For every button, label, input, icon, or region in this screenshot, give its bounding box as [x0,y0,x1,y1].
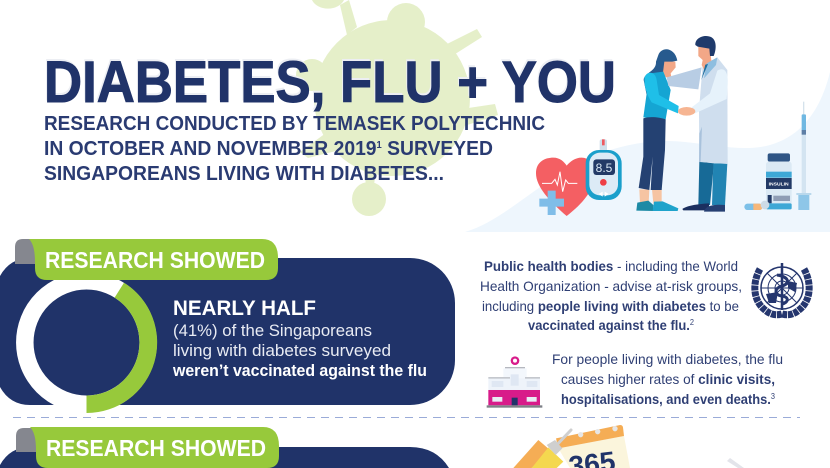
subtitle: IN OCTOBER AND NOVEMBER 2019 [44,137,397,160]
icon: pills [744,201,769,210]
tab: research showed [29,239,278,280]
WHO advice text [480,258,742,333]
stat text [172,296,427,380]
icon: syringe [796,102,811,210]
icon: glucose meter: 8.5 [596,161,613,175]
icon: WHO emblem [755,263,809,315]
WHO advice text: vaccinated against the flu. [528,317,703,333]
clinical impact text [552,351,783,407]
woman [636,49,679,211]
icon: heart with pulse [536,158,595,216]
WHO advice text: Public health bodies - including the World [484,258,738,274]
icon: hospital [487,356,542,408]
clinical impact text: For people living with diabetes, the flu [552,351,783,367]
title: DIABETES, FLU + YOU [44,50,616,115]
subtitle: 1 [377,140,382,151]
icon: glucose meter [586,139,622,200]
illustration: doctor and patient [636,36,728,212]
clinical impact text: causes higher rates of clinic visits, [561,371,775,387]
subtitle: RESEARCH CONDUCTED BY TEMASEK POLYTECHNIC [44,112,545,135]
icon: calendar and vaccine pen [513,425,630,468]
subtitle [44,112,545,185]
doctor [667,36,728,212]
WHO advice text: including people living with diabetes to be [482,298,739,314]
clinical impact text: 3 [771,392,776,401]
tab: research showed: RESEARCH SHOWED [45,247,265,273]
icon: virus background [296,0,498,216]
clinical impact text: hospitalisations, and even deaths. [561,391,789,407]
stat text: living with diabetes surveyed [173,342,391,360]
handshake [678,107,695,116]
icon: insulin bottle: INSULIN [769,182,789,188]
stat text: weren’t vaccinated against the flu [172,362,427,380]
background wave [465,72,830,232]
tab shadow [15,239,36,264]
WHO advice text: Health Organization - advise at-risk groups, [480,278,742,294]
tab: research showed: RESEARCH SHOWED [46,435,266,461]
panel: research showed 2 [0,427,449,468]
icon: second syringe tip [727,458,744,468]
stat text: NEARLY HALF [173,296,316,320]
subtitle: SURVEYED [382,137,493,160]
tab: research showed [30,427,279,468]
panel: research showed 1 [0,239,455,413]
stat text: (41%) of the Singaporeans [173,322,372,340]
WHO advice text: 2 [690,318,695,327]
donut chart: 41% [25,281,157,413]
panel background [0,258,455,405]
subtitle: SINGAPOREANS LIVING WITH DIABETES... [44,162,444,185]
icon: insulin bottle [766,153,792,209]
